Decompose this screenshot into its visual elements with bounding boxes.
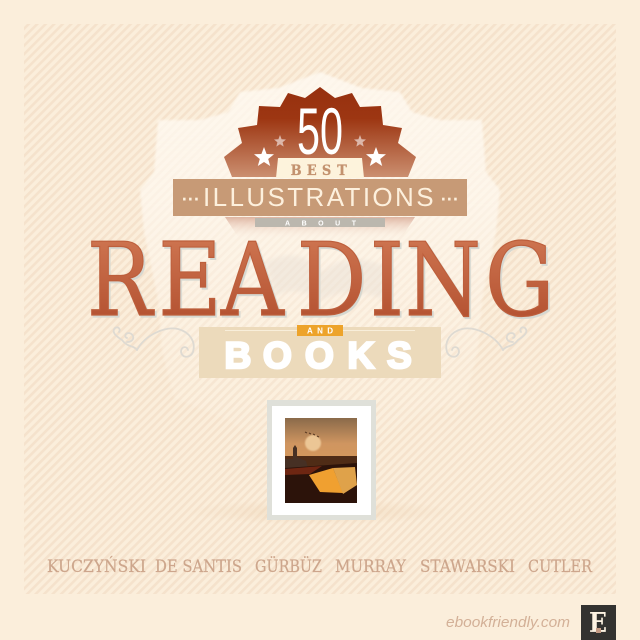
- name: GÜRBÜZ: [255, 556, 322, 577]
- books plate: [199, 325, 441, 378]
- illustrations banner: [173, 179, 467, 216]
- logo: [581, 605, 616, 640]
- illustrations label: ···: [439, 182, 457, 212]
- BEST label: BEST: [291, 164, 347, 179]
- AND tag: [297, 325, 343, 336]
- BOOKS label: BOOKS: [224, 335, 412, 376]
- stars: [254, 135, 386, 166]
- painting: [285, 418, 357, 503]
- READING heading: READING: [87, 223, 554, 340]
- BEST plate: [276, 158, 364, 178]
- name: DE SANTIS: [155, 557, 242, 577]
- badge: [224, 87, 416, 179]
- illustrations label: ···: [180, 182, 198, 212]
- open book: [309, 468, 343, 493]
- badge starburst: [224, 87, 416, 177]
- illustrations label: ILLUSTRATIONS: [203, 182, 436, 212]
- right flourish: [446, 327, 526, 357]
- left flourish: [114, 327, 194, 357]
- name: STAWARSKI: [420, 557, 515, 577]
- illustrator names: [47, 556, 593, 577]
- number 50: 50: [297, 94, 343, 168]
- pale starburst behind title: [140, 72, 500, 456]
- name: KUCZYŃSKI: [47, 556, 146, 577]
- framed picture: [267, 400, 376, 520]
- name: CUTLER: [528, 557, 593, 577]
- logo letter: E: [589, 608, 607, 639]
- frame shadow: [185, 499, 455, 525]
- name: MURRAY: [335, 557, 407, 577]
- about bar: [255, 218, 385, 228]
- AND label: AND: [307, 326, 333, 336]
- site url: ebookfriendly.com: [446, 614, 570, 631]
- faded badge reflection: [225, 217, 415, 240]
- about label: ABOUT: [285, 220, 357, 228]
- open book watermark: [265, 255, 395, 300]
